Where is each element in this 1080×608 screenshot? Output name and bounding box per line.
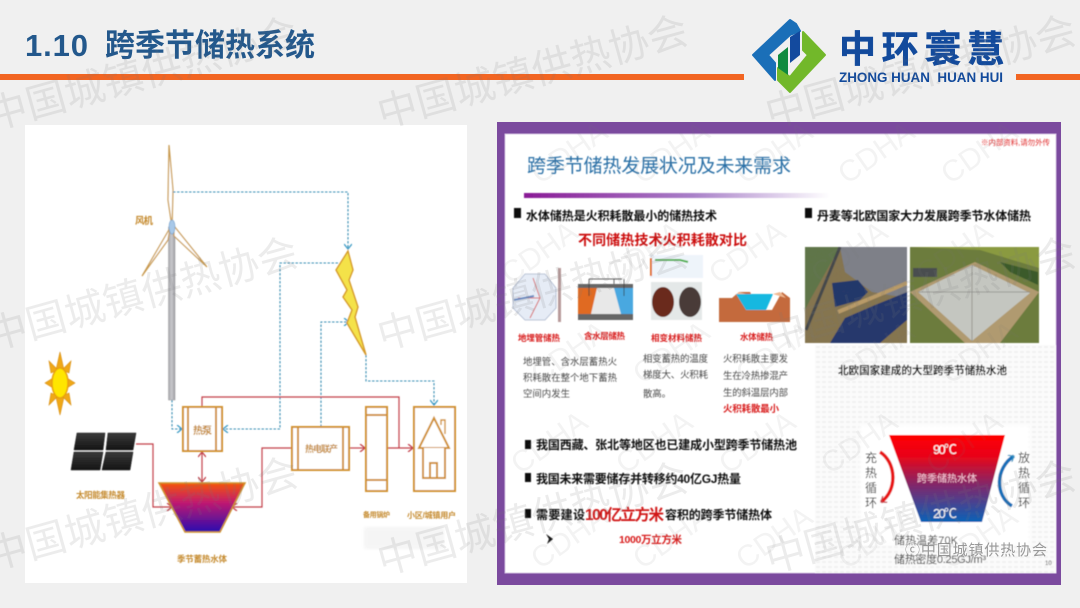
watermarks: association name: 中国城镇供热协会 <box>761 9 1080 137</box>
watermarks: CDHA <box>495 115 1024 576</box>
watermarks: CDHA: CDHA <box>730 115 819 191</box>
label: charging loop: 充 <box>865 450 877 465</box>
storage water body <box>159 483 245 532</box>
watermarks: association name: 中国城镇供热协会 <box>373 456 693 584</box>
box: heat pump <box>183 407 222 451</box>
diagram: storage cross-section: 90℃ <box>933 442 957 457</box>
source watermark: ⓒ中国城镇供热协会 <box>905 542 1047 559</box>
box: CHP <box>292 427 349 470</box>
box: backup boiler <box>366 407 387 491</box>
logo wordmark: 中环寰慧 <box>839 29 1004 70</box>
newsprint backdrop <box>815 345 1056 573</box>
label: charging loop: 热 <box>865 466 877 480</box>
arrow: boiler to users <box>387 447 413 449</box>
watermarks: CDHA: CDHA <box>832 115 921 191</box>
slide title: 跨季节储热发展状况及未来需求 <box>527 155 791 177</box>
header rule left <box>0 74 744 80</box>
photo: aerial ponds <box>805 247 907 343</box>
diagram: storage cross-section: 20℃ <box>933 506 957 521</box>
watermarks: CDHA: CDHA <box>910 215 999 291</box>
watermarks: CDHA: CDHA <box>505 405 594 481</box>
text: ground and aquifer note: 空间内发生 <box>523 388 570 399</box>
image: phase change materials <box>650 255 703 320</box>
watermarks: CDHA: CDHA <box>627 500 716 576</box>
box: users with house <box>414 407 455 491</box>
label: discharge loop: 热 <box>1018 466 1030 480</box>
watermarks: CDHA: CDHA <box>832 500 921 576</box>
bullet: northern europe: 丹麦等北欧国家大力发展跨季节水体储热 <box>817 208 1031 223</box>
text: phase change note: 梯度大、火积耗 <box>643 369 709 380</box>
bullet: capacity: 需要建设 <box>536 507 585 522</box>
icon: lightning bolt <box>336 251 366 355</box>
watermarks: CDHA: CDHA <box>627 315 716 391</box>
icon: wind turbine <box>142 145 207 400</box>
watermarks: CDHA: CDHA <box>730 500 819 576</box>
label: ground pipe: 地埋管储热 <box>518 333 560 343</box>
watermarks: association name: 中国城镇供热协会 <box>373 9 693 137</box>
watermarks: CDHA: CDHA <box>730 315 819 391</box>
watermarks: CDHA: CDHA <box>832 315 921 391</box>
arrow: CHP to boiler <box>349 447 365 449</box>
bullet: capacity <box>525 505 772 524</box>
arrow: turbine to heat pump <box>172 400 182 429</box>
label: phase change: 相变材料储热 <box>651 333 702 343</box>
smudge <box>364 527 444 549</box>
text: water storage note: 火积耗散主要发 <box>723 353 789 364</box>
arrow: discharge loop <box>999 456 1014 506</box>
image: water pit <box>719 292 790 322</box>
caption: pits: 北欧国家建成的大型跨季节储热水池 <box>838 364 1007 377</box>
logo latin name: ZHONG HUAN HUAN HUI <box>839 69 1003 85</box>
text: water storage note: 生在冷热掺混产 <box>723 370 788 381</box>
label: storage water body: 季节蓄热水体 <box>177 554 227 564</box>
backdrop centre <box>860 425 1030 545</box>
watermarks: CDHA: CDHA <box>525 115 614 191</box>
header rule right <box>1016 74 1080 80</box>
bullet: domestic pits: 我国西藏、张北等地区也已建成小型跨季节储热池 <box>536 437 797 452</box>
watermarks: CDHA: CDHA <box>920 405 1009 481</box>
diagram: storage cross-section: 跨季储热水体 <box>917 472 977 485</box>
bullet: capacity: 100亿立方米 <box>585 505 664 524</box>
watermarks: CDHA: CDHA <box>495 215 584 291</box>
heading: section title: 跨季节储热系统 <box>105 28 315 63</box>
text: water storage note: 火积耗散最小 <box>723 403 780 414</box>
arrow: grid to heat pump <box>223 263 338 429</box>
label: charging loop: 循 <box>865 481 877 495</box>
watermarks: association name: 中国城镇供热协会 <box>761 231 1080 359</box>
bullet: capacity: 容积的跨季节储热体 <box>665 507 772 522</box>
bullet: water storage: 水体储热是火积耗散最小的储热技术 <box>526 208 717 223</box>
watermarks: CDHA: CDHA <box>805 215 894 291</box>
arrow: heat pump to storage <box>201 452 203 482</box>
arrow: collector to storage <box>136 444 172 507</box>
arrow: turbine to grid <box>173 192 348 249</box>
icon: logo mark <box>753 20 825 92</box>
label: discharge loop: 循 <box>1018 481 1030 495</box>
watermarks: CDHA: CDHA <box>703 215 792 291</box>
text: water storage note: 生的斜温层内部 <box>723 387 788 398</box>
arrow: grid to users <box>366 355 434 405</box>
image: aquifer storage <box>578 279 633 320</box>
label: discharge loop: 环 <box>1018 496 1030 510</box>
box: heat pump: 热泵 <box>193 424 212 437</box>
watermarks: association name: 中国城镇供热协会 <box>373 231 693 359</box>
arrow: CHP to storage <box>232 448 292 507</box>
arrow: heat pump to users <box>202 397 399 448</box>
label: water storage: 水体储热 <box>740 332 773 342</box>
text: phase change note: 相变蓄热的温度 <box>643 353 708 364</box>
heading: section title: 1.10 <box>25 28 88 63</box>
title gradient rule <box>524 193 830 198</box>
chart title: comparison: 不同储热技术火积耗散对比 <box>578 232 747 248</box>
watermarks: CDHA: CDHA <box>935 115 1024 191</box>
photo: diamond storage pit <box>910 247 1039 343</box>
label: solar collector: 太阳能集热器 <box>76 490 125 500</box>
sub-bullet value: 1000万立方米 <box>619 533 682 546</box>
label: discharge loop: 放 <box>1018 450 1030 465</box>
label: wind turbine: 风机 <box>135 215 153 227</box>
watermarks: association name: 中国城镇供热协会 <box>761 454 1080 582</box>
icon: solar collector <box>71 433 136 470</box>
watermarks: CDHA: CDHA <box>525 315 614 391</box>
panel: embedded slide <box>497 122 1061 585</box>
watermarks: CDHA: CDHA <box>815 405 904 481</box>
watermarks: CDHA: CDHA <box>713 405 802 481</box>
storage temperature difference: 储热温差70K <box>894 533 959 547</box>
watermarks: CDHA: CDHA <box>935 500 1024 576</box>
storage density: 储热密度0.25GJ/m³ <box>894 552 986 566</box>
text: ground and aquifer note: 地埋管、含水层蓄热火 <box>523 356 617 367</box>
page number: 10 <box>1045 561 1052 567</box>
confidential note: ※内部资料,请勿外传 <box>981 137 1050 147</box>
watermarks: CDHA: CDHA <box>525 500 614 576</box>
icon: sun <box>45 352 75 415</box>
text: water storage note <box>723 353 789 414</box>
image: ground pipe storage <box>513 268 561 322</box>
diagram: storage cross-section <box>889 435 1005 522</box>
text: phase change note: 散高。 <box>643 388 671 399</box>
bullet: heat demand: 我国未来需要储存并转移约40亿GJ热量 <box>536 471 741 486</box>
panel: system diagram <box>25 125 467 583</box>
text: ground and aquifer note: 积耗散在整个地下蓄热 <box>523 372 618 383</box>
label: aquifer: 含水层储热 <box>584 331 625 341</box>
arrow: CHP to grid <box>321 322 349 427</box>
watermarks: CDHA: CDHA <box>610 405 699 481</box>
box: CHP: 热电联产 <box>305 443 338 454</box>
sub-bullet arrow <box>546 534 553 544</box>
watermarks: CDHA: CDHA <box>935 315 1024 391</box>
watermarks: CDHA: CDHA <box>627 115 716 191</box>
label: charging loop: 环 <box>865 496 877 510</box>
logo <box>753 20 1004 92</box>
watermarks: CDHA: CDHA <box>600 215 689 291</box>
label: users: 小区/城镇用户 <box>407 510 456 520</box>
arrow: charging loop <box>880 452 893 502</box>
label: backup boiler: 备用锅炉 <box>363 510 390 519</box>
